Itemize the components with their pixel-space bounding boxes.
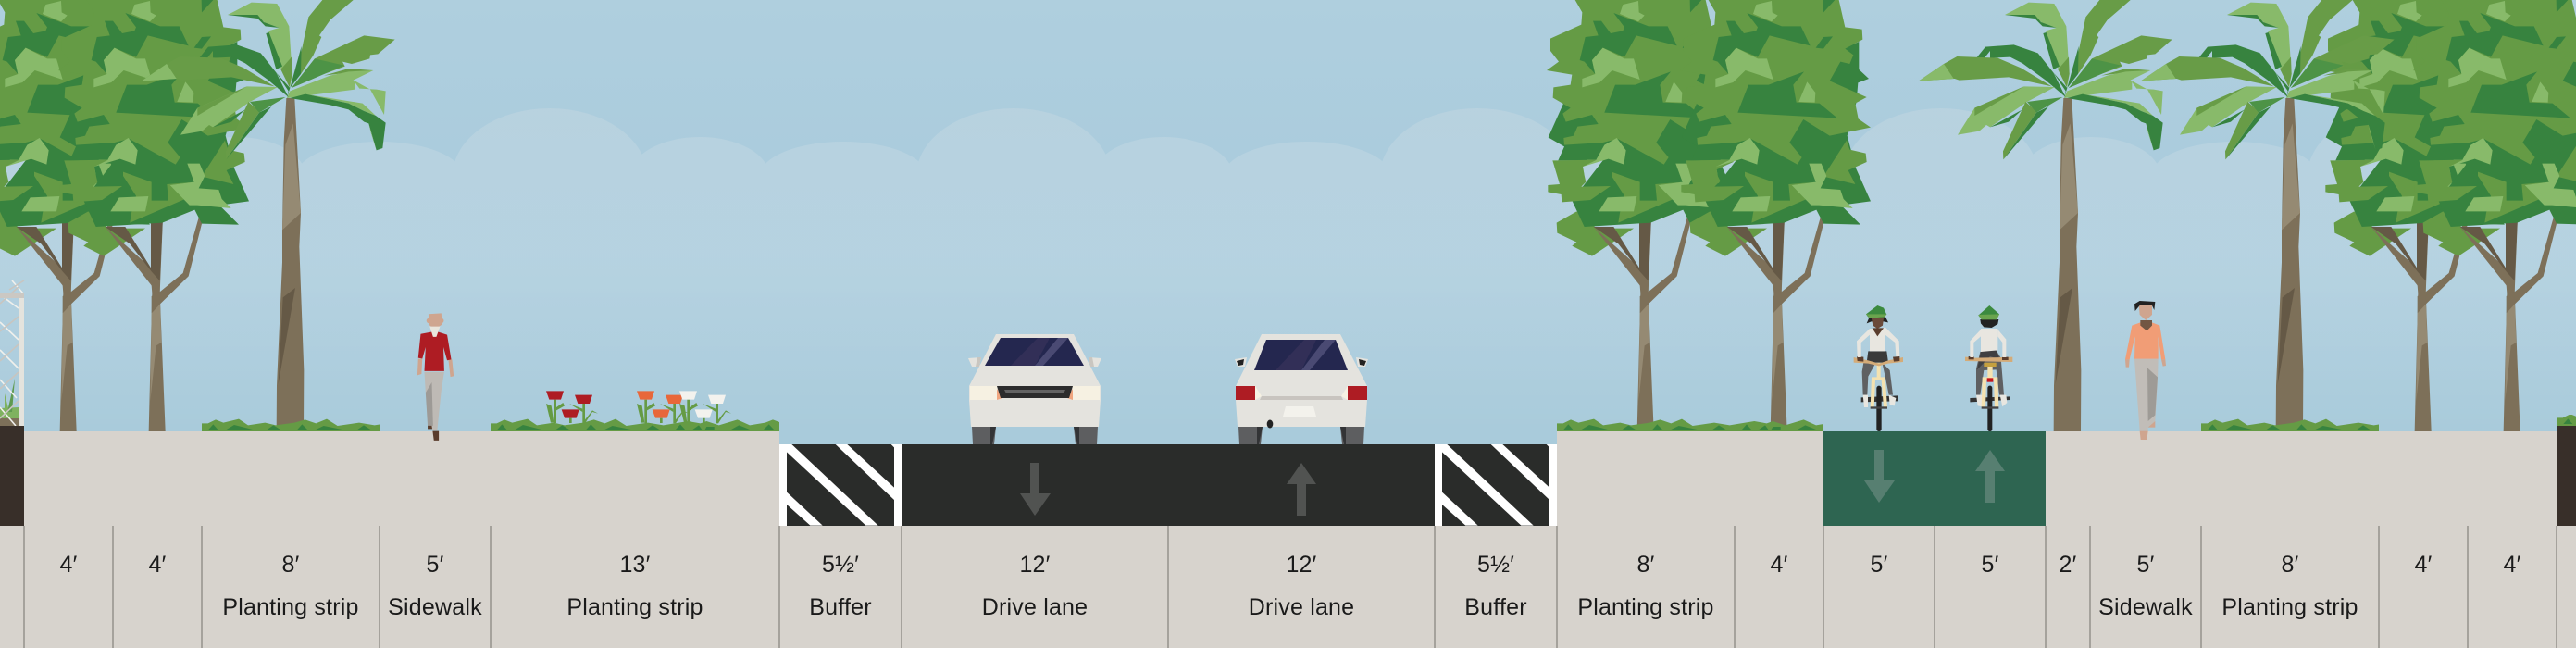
palm tree, right 1 [1919,0,2172,431]
sky background [0,0,2576,444]
trees, far-right pair [2324,0,2576,431]
segment labels: 5½′ [822,552,859,578]
left dark edge block [0,426,24,526]
palm tree, left [142,0,395,431]
segment labels: Planting strip [2221,594,2358,620]
segment labels: 5′ [1981,552,1999,578]
arrow: down, bike lane [1864,450,1895,503]
planting strip with flowers [491,391,779,431]
planting strip grass left [202,418,380,431]
pedestrian with red shirt [417,313,454,441]
segment labels: 4′ [2503,552,2521,578]
segment labels: 4′ [148,552,167,578]
palm tree, right 2 [2141,0,2395,431]
segment labels: 2′ [2059,552,2077,578]
bike lanes [1823,431,2046,526]
segment labels: Drive lane [982,594,1088,620]
segment labels: 4′ [2414,552,2433,578]
segment labels: Sidewalk [388,594,482,620]
drive lanes [902,444,1435,526]
segment labels: 4′ [1770,552,1788,578]
cyclist, rear view [1965,305,2012,431]
pedestrian with orange shirt [2125,301,2166,440]
segment labels: Planting strip [1577,594,1714,620]
planting strip grass centre [1557,418,1823,431]
segment labels: Buffer [809,594,872,620]
segment labels: 13′ [619,552,651,578]
segment labels: 4′ [59,552,78,578]
segment labels: 8′ [2281,552,2299,578]
segment labels: Planting strip [222,594,359,620]
arrow: up, bike lane [1975,450,2005,503]
segment labels: Drive lane [1249,594,1354,620]
segment labels: 5′ [2136,552,2155,578]
clouds [0,108,2576,431]
segment labels: Buffer [1464,594,1527,620]
cyclist, front view [1854,305,1903,431]
segment labels: Planting strip [566,594,703,620]
measurement band [0,526,2576,648]
segment labels: 5½′ [1477,552,1514,578]
trees, left pair [0,0,249,431]
segment labels: 8′ [281,552,300,578]
segment labels: 5′ [426,552,444,578]
ground surfaces [24,431,2557,526]
left fence with planting behind [0,280,24,426]
car rear view [1235,334,1368,444]
segment labels: Sidewalk [2098,594,2193,620]
left buffer with hatching [779,444,902,526]
planting strip grass right [2201,418,2379,431]
car front view [968,334,1101,444]
arrow: down, drive lane [1020,463,1051,516]
segment labels: 8′ [1636,552,1655,578]
segment labels [59,552,2521,620]
right edge grass and dark block [2557,414,2576,526]
trees, centre-right pair [1547,0,1871,431]
segment labels: 12′ [1286,552,1317,578]
segment dividers [24,526,2557,648]
segment labels: 5′ [1870,552,1888,578]
arrow: up, drive lane [1287,463,1316,516]
segment labels: 12′ [1019,552,1051,578]
right buffer with hatching [1435,444,1557,526]
